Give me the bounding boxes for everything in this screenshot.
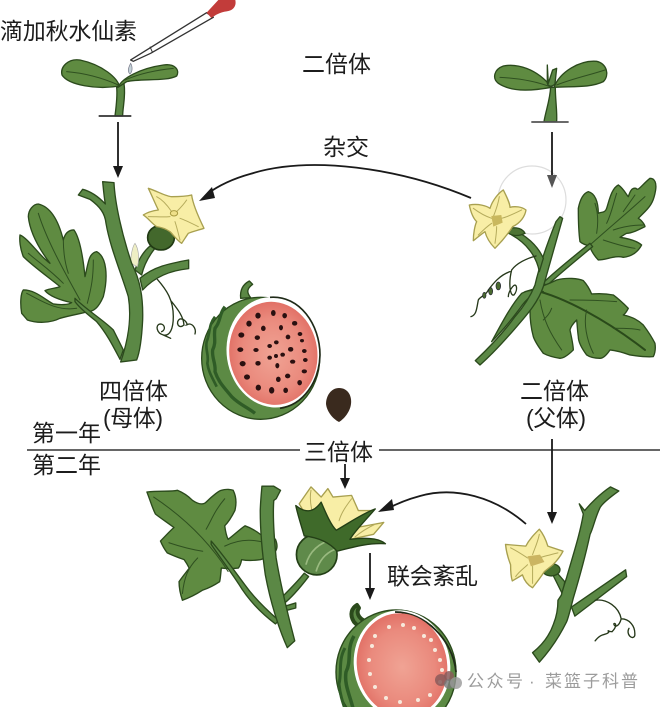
arrow: male flower to triploid flower <box>378 492 526 524</box>
flower stalk <box>135 246 155 275</box>
arrow: triploid to flower <box>340 464 350 489</box>
seeds <box>237 310 308 394</box>
flower stalk <box>281 573 309 604</box>
tendril <box>157 279 195 338</box>
label: mother parenthetical: (母体) <box>103 405 163 431</box>
leaf <box>147 489 277 600</box>
diploid plant second year <box>506 487 635 662</box>
icon: dropper <box>128 0 236 74</box>
seedling right <box>495 61 607 122</box>
female flower <box>143 188 204 243</box>
sepals <box>296 502 385 551</box>
label: colchicine drop: 滴加秋水仙素 <box>0 18 137 44</box>
label: diploid top: 二倍体 <box>302 51 371 77</box>
ovary <box>148 225 174 250</box>
seedless watermelon <box>336 601 460 707</box>
flower stalk <box>512 230 543 272</box>
label: diploid father: 二倍体 <box>520 378 589 404</box>
main stem <box>260 486 295 648</box>
year divider line <box>27 449 660 451</box>
label: synapsis disorder: 联会紊乱 <box>387 563 478 589</box>
watermark text: 公众号 <box>467 672 523 691</box>
label: tetraploid mother: 四倍体 <box>99 378 168 404</box>
watermark name: 菜篮子科普 <box>545 672 638 691</box>
big leaf <box>20 204 106 322</box>
side branch <box>140 260 189 290</box>
arrow: cross pollination <box>199 165 471 201</box>
yellow petals <box>299 487 384 539</box>
tendril <box>471 256 536 317</box>
ovary <box>296 534 337 575</box>
black seed <box>326 388 351 422</box>
arrow: flower to seedless melon <box>365 553 375 600</box>
arrow: left seedling to plant <box>113 122 123 178</box>
label: cross: 杂交 <box>323 134 369 160</box>
triploid plant <box>147 486 385 648</box>
male flower <box>506 529 563 588</box>
upper leaf <box>578 178 656 260</box>
white seeds <box>367 623 444 704</box>
watermark <box>435 671 638 691</box>
arrow: father to second-year flower <box>547 439 557 524</box>
ovary <box>505 228 525 235</box>
watermark dot: · <box>529 672 535 691</box>
arrow: right seedling to plant <box>547 132 557 188</box>
label: father parenthetical: (父体) <box>526 405 586 431</box>
icon: watermark logo <box>435 671 462 689</box>
petiole <box>75 298 123 359</box>
leaf stalk <box>543 243 593 286</box>
small bud <box>131 243 139 267</box>
petiole <box>211 541 279 624</box>
pollination circle <box>498 166 566 234</box>
male flower <box>469 190 526 248</box>
diploid father plant <box>469 178 656 365</box>
main stem <box>78 182 143 362</box>
label: triploid: 三倍体 <box>304 439 373 465</box>
label: first year: 第一年 <box>32 420 101 446</box>
tetraploid plant <box>20 182 204 362</box>
lower leaf <box>525 278 655 358</box>
watermelon with seeds <box>202 281 327 419</box>
petiole and main stem <box>492 290 543 342</box>
tendril <box>595 600 635 641</box>
seedling left <box>62 60 178 116</box>
label: second year: 第二年 <box>32 452 101 478</box>
